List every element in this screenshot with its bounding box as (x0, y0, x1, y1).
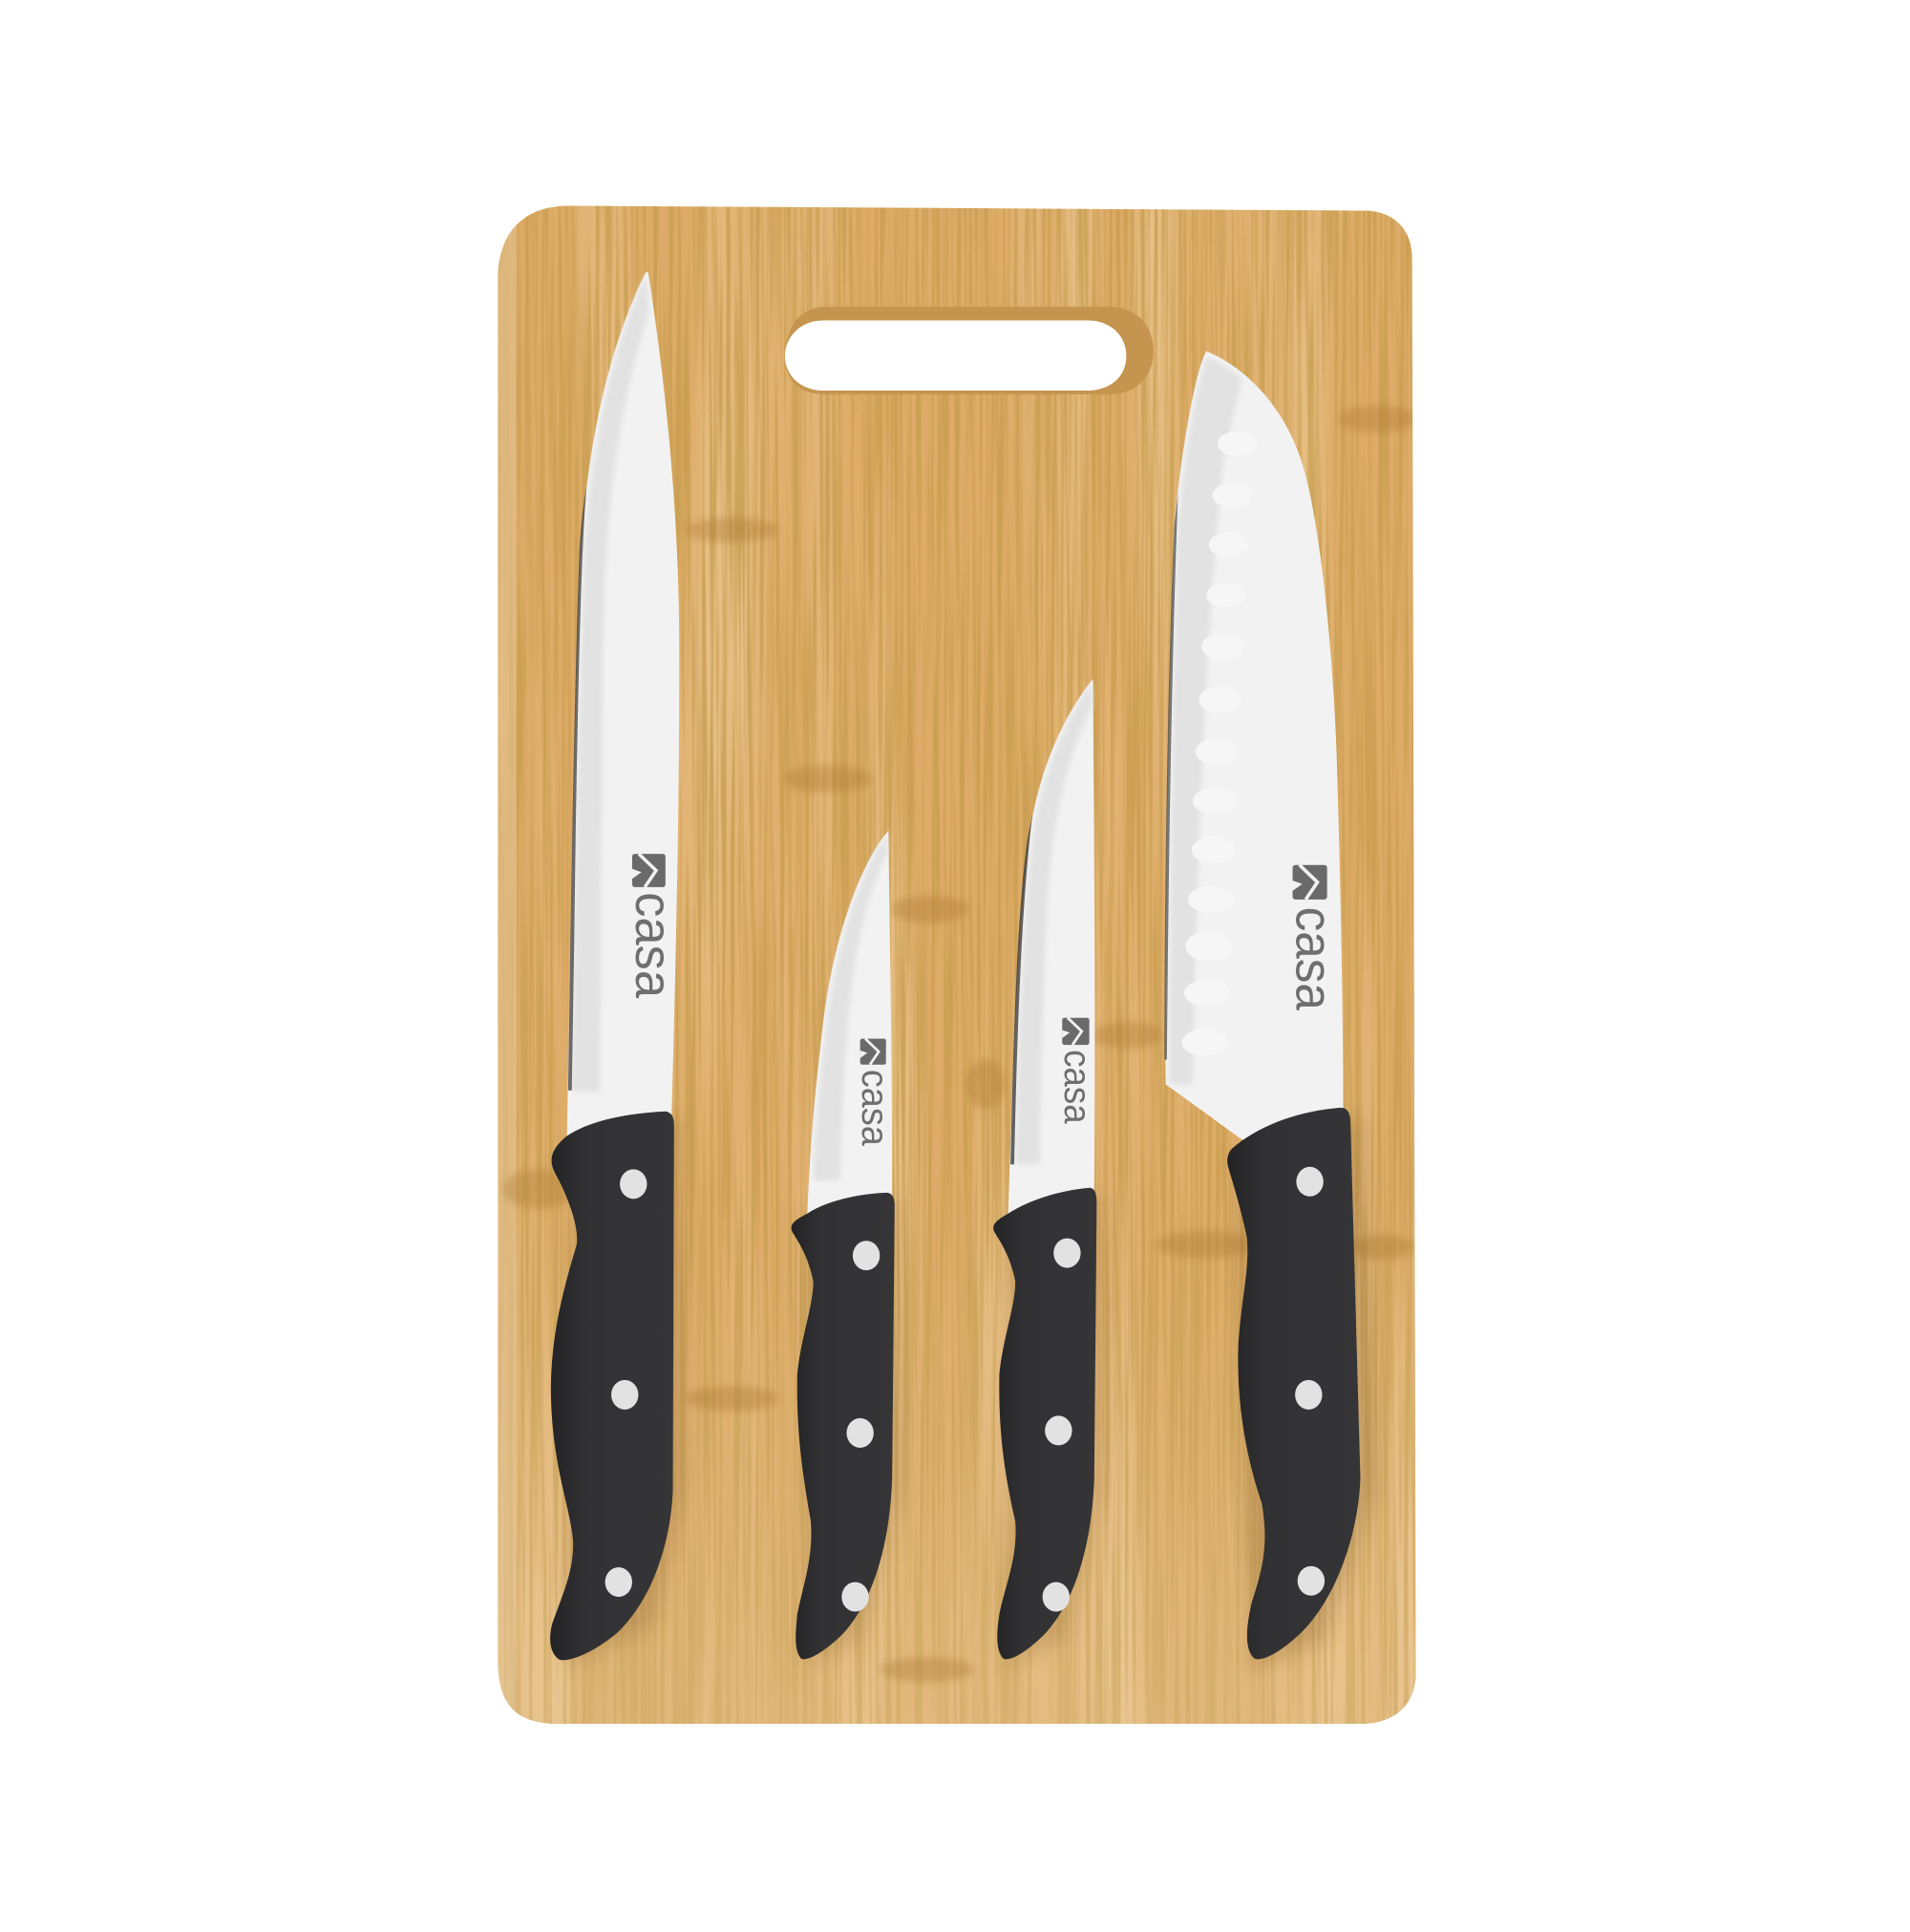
knife 4: santoku knife (1164, 351, 1378, 1670)
handle hole (785, 307, 1154, 394)
handle shadow (567, 1115, 685, 1666)
logo: casa (854, 1070, 895, 1146)
knife 3: utility knife (993, 679, 1103, 1666)
blade bevel (1015, 684, 1092, 1164)
logo: casa (1284, 907, 1342, 1011)
rivets (1043, 1239, 1081, 1612)
blade bevel (1169, 357, 1242, 1084)
handle (550, 1112, 674, 1660)
handle shadow (1239, 1115, 1378, 1670)
scallops (1181, 432, 1257, 1056)
handle (1227, 1108, 1360, 1659)
blade (567, 272, 679, 1139)
logo (1056, 1018, 1097, 1124)
blade (807, 831, 892, 1220)
logo: casa (1056, 1050, 1097, 1124)
illustration: knife set on cutting board (498, 206, 1415, 1724)
handle (993, 1188, 1096, 1659)
handle shadow (807, 1195, 902, 1666)
blade edge shadow (568, 487, 586, 1091)
blade edge shadow (1010, 814, 1032, 1164)
blade edge shadow (1164, 493, 1178, 1060)
logo: casa (625, 892, 682, 999)
handle shadow (1008, 1193, 1103, 1666)
knife 2: paring knife (792, 831, 902, 1666)
blade bevel (572, 275, 649, 1092)
blade (1165, 351, 1343, 1139)
rivets (1295, 1167, 1325, 1596)
blade (1008, 679, 1094, 1220)
rivets (605, 1169, 647, 1597)
logo (1284, 865, 1342, 1011)
handle (792, 1193, 895, 1659)
knife 1: long slicing knife (550, 272, 685, 1666)
blade bevel (814, 836, 887, 1180)
panel: bamboo cutting board (493, 197, 1423, 1731)
rivets (841, 1241, 880, 1612)
